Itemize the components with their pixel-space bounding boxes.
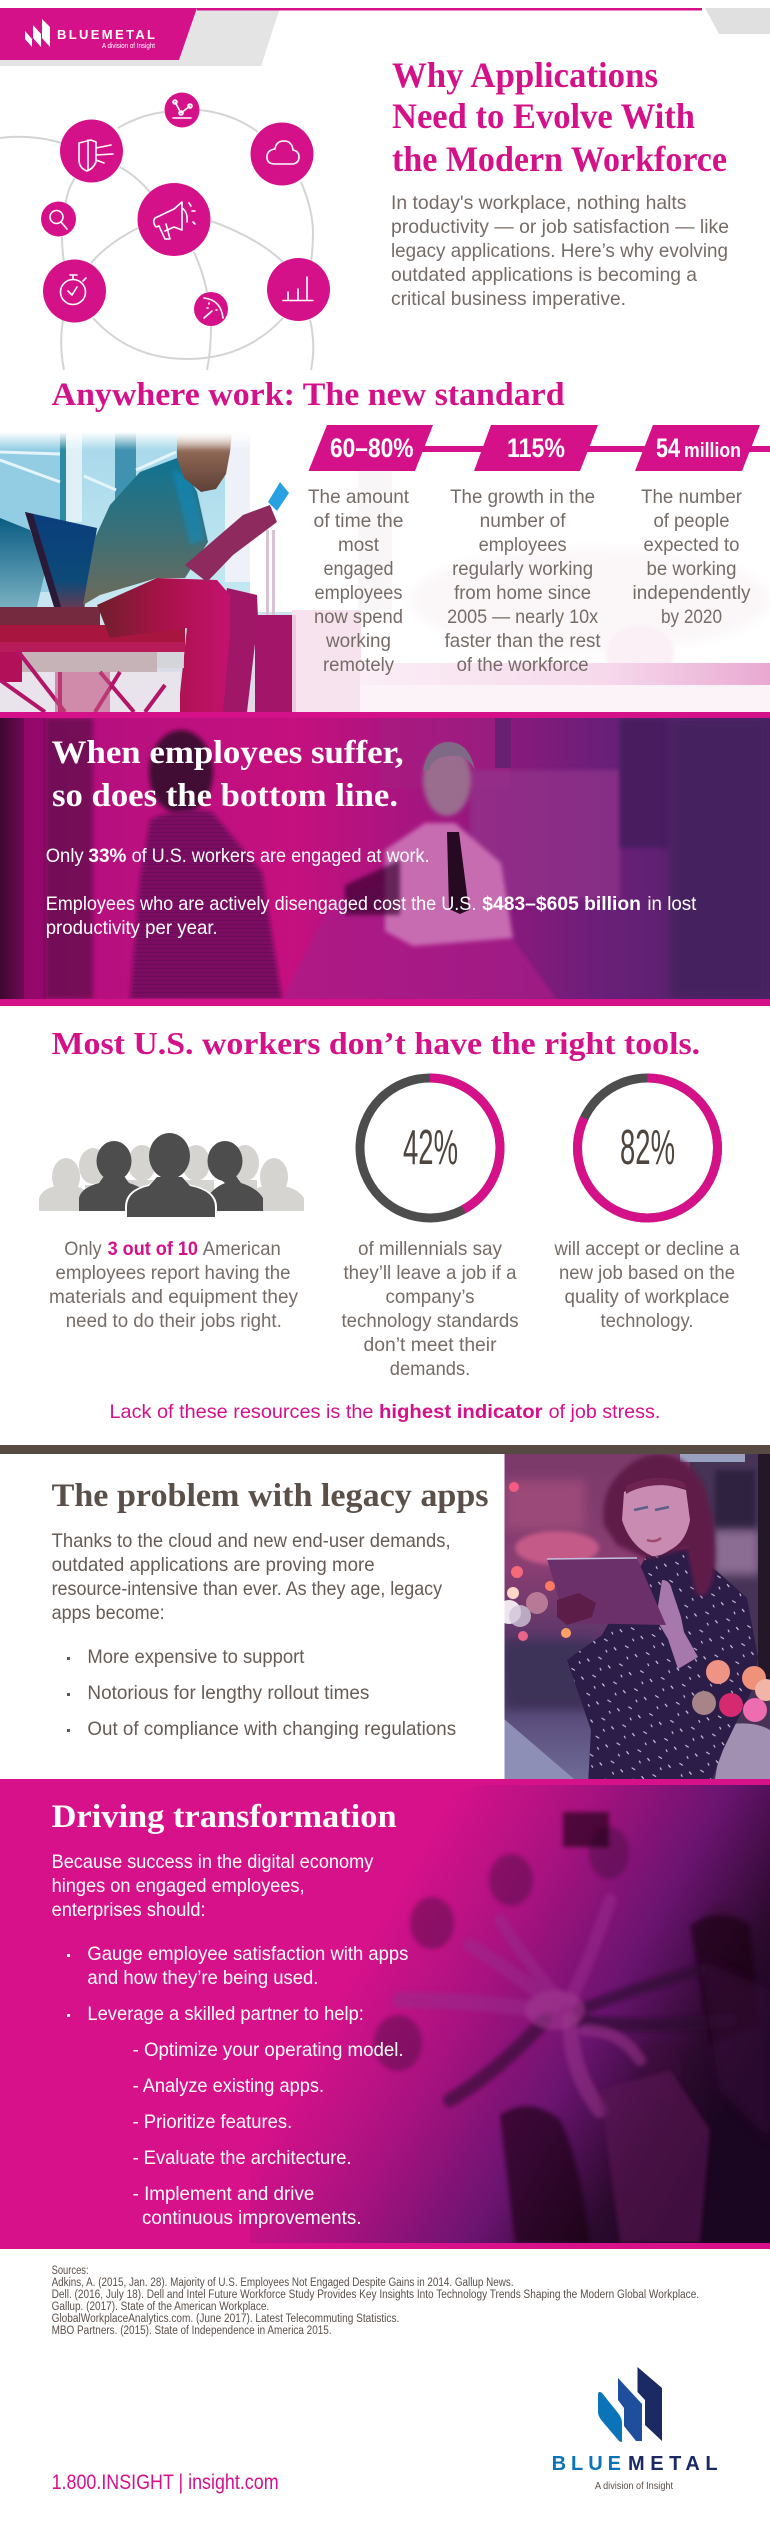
list: recommendations (67, 1943, 409, 2229)
callout: job stress (110, 1401, 660, 1423)
text: 3 out of 10: 3 out of 10 (108, 1238, 198, 1260)
intro text: critical business imperative. (391, 288, 626, 310)
heading (52, 735, 404, 814)
panel: bottom line (0, 718, 770, 1000)
sources: Sources: (52, 2265, 89, 2277)
list: recommendations: and how they’re being used. (87, 1967, 318, 1989)
text: 3 out of 10: American (203, 1238, 281, 1260)
logo: BlueMetal white: A division of Insight (102, 43, 155, 50)
panel: anywhere work (0, 432, 770, 712)
text: engagement stats: in lost (647, 893, 697, 915)
stat text: growth (445, 486, 601, 676)
stat tag: 54 million: 54 (656, 433, 680, 463)
photo: meeting with duotone (0, 718, 770, 1000)
icon: stopwatch (43, 260, 106, 322)
text: workplace technology (554, 1238, 740, 1332)
stat text: remote time: engaged (324, 558, 394, 580)
stat tag: 115% (474, 425, 598, 471)
connecting lines (0, 110, 313, 370)
logo: BlueMetal white (25, 19, 155, 50)
intro text: In today's workplace, nothing halts (391, 192, 687, 214)
stat text: growth: number of (480, 510, 566, 532)
text: engagement stats: 33% (88, 845, 126, 867)
sources: GlobalWorkplaceAnalytics.com. (June 2017). Latest Telecommuting Statistics. (52, 2313, 399, 2325)
list: recommendations: Leverage a skilled partner to help: (87, 2003, 364, 2025)
header banner (0, 8, 770, 66)
text: millennials: demands. (390, 1358, 470, 1380)
logo: BlueMetal color (552, 2367, 718, 2492)
list: recommendations: - Prioritize features. (133, 2111, 292, 2133)
stat text: growth: employees (479, 534, 567, 556)
stat text: remote time: remotely (323, 654, 394, 676)
stat text: independent workers: expected to (644, 534, 740, 556)
photo: man with tablet (0, 432, 296, 712)
panel: legacy apps (52, 1454, 770, 1785)
intro text: legacy applications. Here’s why evolving (391, 240, 728, 262)
text: 3 out of 10: need to do their jobs right. (66, 1310, 282, 1332)
text: workplace technology: quality of workplace (564, 1286, 730, 1308)
stat text: independent workers: independently (632, 582, 751, 604)
text: millennials (342, 1238, 519, 1380)
text: legacy intro: outdated applications are proving more (52, 1554, 375, 1576)
stat tag: 115%: 115% (507, 433, 565, 463)
text: driving intro: hinges on engaged employees, (52, 1875, 305, 1897)
list: recommendations: - Evaluate the architecture. (133, 2147, 352, 2169)
intro text: outdated applications is becoming a (391, 264, 697, 286)
text: millennials: of millennials say (358, 1238, 502, 1260)
stat text: independent workers (632, 486, 751, 628)
icon: gauge (194, 292, 228, 326)
text: engagement stats: Employees who are actively disengaged cost the U.S. (46, 893, 476, 915)
sources: Dell. (2016, July 18). Dell and Intel Future Workforce Study Provides Key Insights Into Technology Trends Shaping the Modern Global Workplace. (52, 2289, 699, 2301)
stat text: remote time: now spend (314, 606, 403, 628)
stat text: growth: faster than the rest (445, 630, 601, 652)
text: engagement stats: of U.S. workers are engaged at work. (132, 845, 430, 867)
stat text: independent workers: be working (646, 558, 736, 580)
title: Why Applications (392, 55, 658, 95)
callout: job stress: Lack of these resources is the (110, 1401, 374, 1423)
list: legacy problems: Out of compliance with changing regulations (87, 1718, 456, 1740)
callout: job stress: of job stress. (549, 1401, 660, 1423)
divider bar (0, 1445, 770, 1454)
chart: 82% ring (578, 1078, 718, 1218)
bar under photo (0, 712, 770, 718)
sources: MBO Partners. (2015). State of Independence in America 2015. (52, 2325, 332, 2337)
stat text: independent workers: The number (641, 486, 742, 508)
text: engagement stats: productivity per year. (46, 917, 218, 939)
icon: bar chart (267, 258, 330, 321)
intro text (391, 192, 729, 310)
stat text: remote time: of time the (314, 510, 404, 532)
logo: BlueMetal color: BLUE (552, 2453, 621, 2475)
stat tag: 60–80% (308, 425, 433, 471)
stat text: independent workers: by 2020 (661, 606, 722, 628)
heading: Driving transformation (52, 1799, 397, 1835)
stat tag: 54 million (635, 425, 760, 471)
footer contact: 1.800.INSIGHT | insight.com (52, 2471, 279, 2494)
text: legacy intro: Thanks to the cloud and new end-user demands, (52, 1530, 451, 1552)
list: legacy problems (67, 1646, 456, 1740)
icon: search (41, 202, 76, 236)
heading: When employees suffer, (52, 735, 404, 771)
stat text: growth: The growth in the (450, 486, 595, 508)
panel: driving transformation (0, 1779, 770, 2249)
text: millennials: don’t meet their (364, 1334, 497, 1356)
icon: analytics node (164, 92, 200, 128)
text: workplace technology: technology. (600, 1310, 694, 1332)
heading: so does the bottom line. (52, 778, 398, 814)
text: engagement stats: Only (46, 845, 84, 867)
photo: woman with tablet (497, 1454, 770, 1785)
icon: cloud (250, 122, 314, 186)
text: millennials: technology standards (342, 1310, 519, 1332)
icon: megaphone (138, 183, 210, 256)
text: driving intro (52, 1851, 374, 1921)
sources: Adkins, A. (2015, Jan. 28). Majority of U.S. Employees Not Engaged Despite Gains in 2014. Gallup News. (52, 2277, 514, 2289)
text: 3 out of 10 (49, 1238, 298, 1332)
title: the Modern Workforce (392, 139, 727, 179)
stat text: independent workers: of people (654, 510, 730, 532)
logo: BlueMetal white: BLUEMETAL (57, 27, 155, 42)
logo: BlueMetal color: METAL (628, 2453, 718, 2475)
chart: 42% ring: 42% (403, 1121, 458, 1175)
list: recommendations: continuous improvements. (142, 2207, 362, 2229)
stat text: growth: 2005 — nearly 10x (447, 606, 598, 628)
list: recommendations: - Implement and drive (133, 2183, 314, 2205)
text: workplace technology: new job based on the (559, 1262, 735, 1284)
sources: Gallup. (2017). State of the American Workplace. (52, 2301, 269, 2313)
list: recommendations: - Analyze existing apps. (133, 2075, 324, 2097)
stat tag: 54 million: million (684, 440, 741, 462)
list: legacy problems: Notorious for lengthy rollout times (87, 1682, 370, 1704)
stat text: growth: from home since (454, 582, 591, 604)
text: 3 out of 10: Only (64, 1238, 102, 1260)
stat connector line (415, 446, 770, 452)
text: driving intro: enterprises should: (52, 1899, 206, 1921)
text: millennials: they’ll leave a job if a (344, 1262, 517, 1284)
icon: group of people (39, 1133, 304, 1217)
text: workplace technology: will accept or decline a (554, 1238, 740, 1260)
stat text: remote time (308, 486, 410, 676)
stat text: growth: of the workforce (457, 654, 589, 676)
stat text: growth: regularly working (452, 558, 593, 580)
stat text: remote time: The amount (308, 486, 410, 508)
text: legacy intro: apps become: (52, 1602, 165, 1624)
photo: team hands together (250, 1785, 770, 2243)
text: engagement stats: $483–$605 billion (482, 893, 641, 915)
logo: BlueMetal color: A division of Insight (595, 2480, 673, 2492)
stat text: remote time: working (325, 630, 391, 652)
heading: tools: Most U.S. workers don’t have the right tools. (52, 1025, 700, 1061)
icon: shield (60, 120, 123, 182)
title (392, 55, 727, 179)
list: legacy problems: More expensive to support (87, 1646, 305, 1668)
bar under bottom line panel (0, 999, 770, 1006)
list: recommendations: Gauge employee satisfaction with apps (87, 1943, 409, 1965)
text: 3 out of 10: materials and equipment they (49, 1286, 298, 1308)
chart: 42% ring (360, 1078, 500, 1218)
chart: 82% ring: 82% (620, 1121, 675, 1175)
heading: The problem with legacy apps (52, 1478, 489, 1514)
text: engagement stats (46, 845, 697, 939)
text: legacy intro: resource-intensive than ever. As they age, legacy (52, 1578, 442, 1600)
text: millennials: company’s (386, 1286, 475, 1308)
text: legacy intro (52, 1530, 451, 1624)
faded airplane background (291, 470, 770, 712)
title: Need to Evolve With (392, 96, 695, 136)
stat text: remote time: most (338, 534, 380, 556)
heading: anywhere work: Anywhere work: The new standard (52, 377, 565, 413)
intro text: productivity — or job satisfaction — like (391, 216, 729, 238)
sources (52, 2265, 699, 2337)
stat text: remote time: employees (314, 582, 403, 604)
text: driving intro: Because success in the digital economy (52, 1851, 374, 1873)
callout: job stress: highest indicator (379, 1401, 543, 1423)
list: recommendations: - Optimize your operating model. (133, 2039, 404, 2061)
network illustration (0, 92, 330, 370)
stat tag: 60–80%: 60–80% (330, 433, 414, 463)
text: 3 out of 10: employees report having the (56, 1262, 290, 1284)
